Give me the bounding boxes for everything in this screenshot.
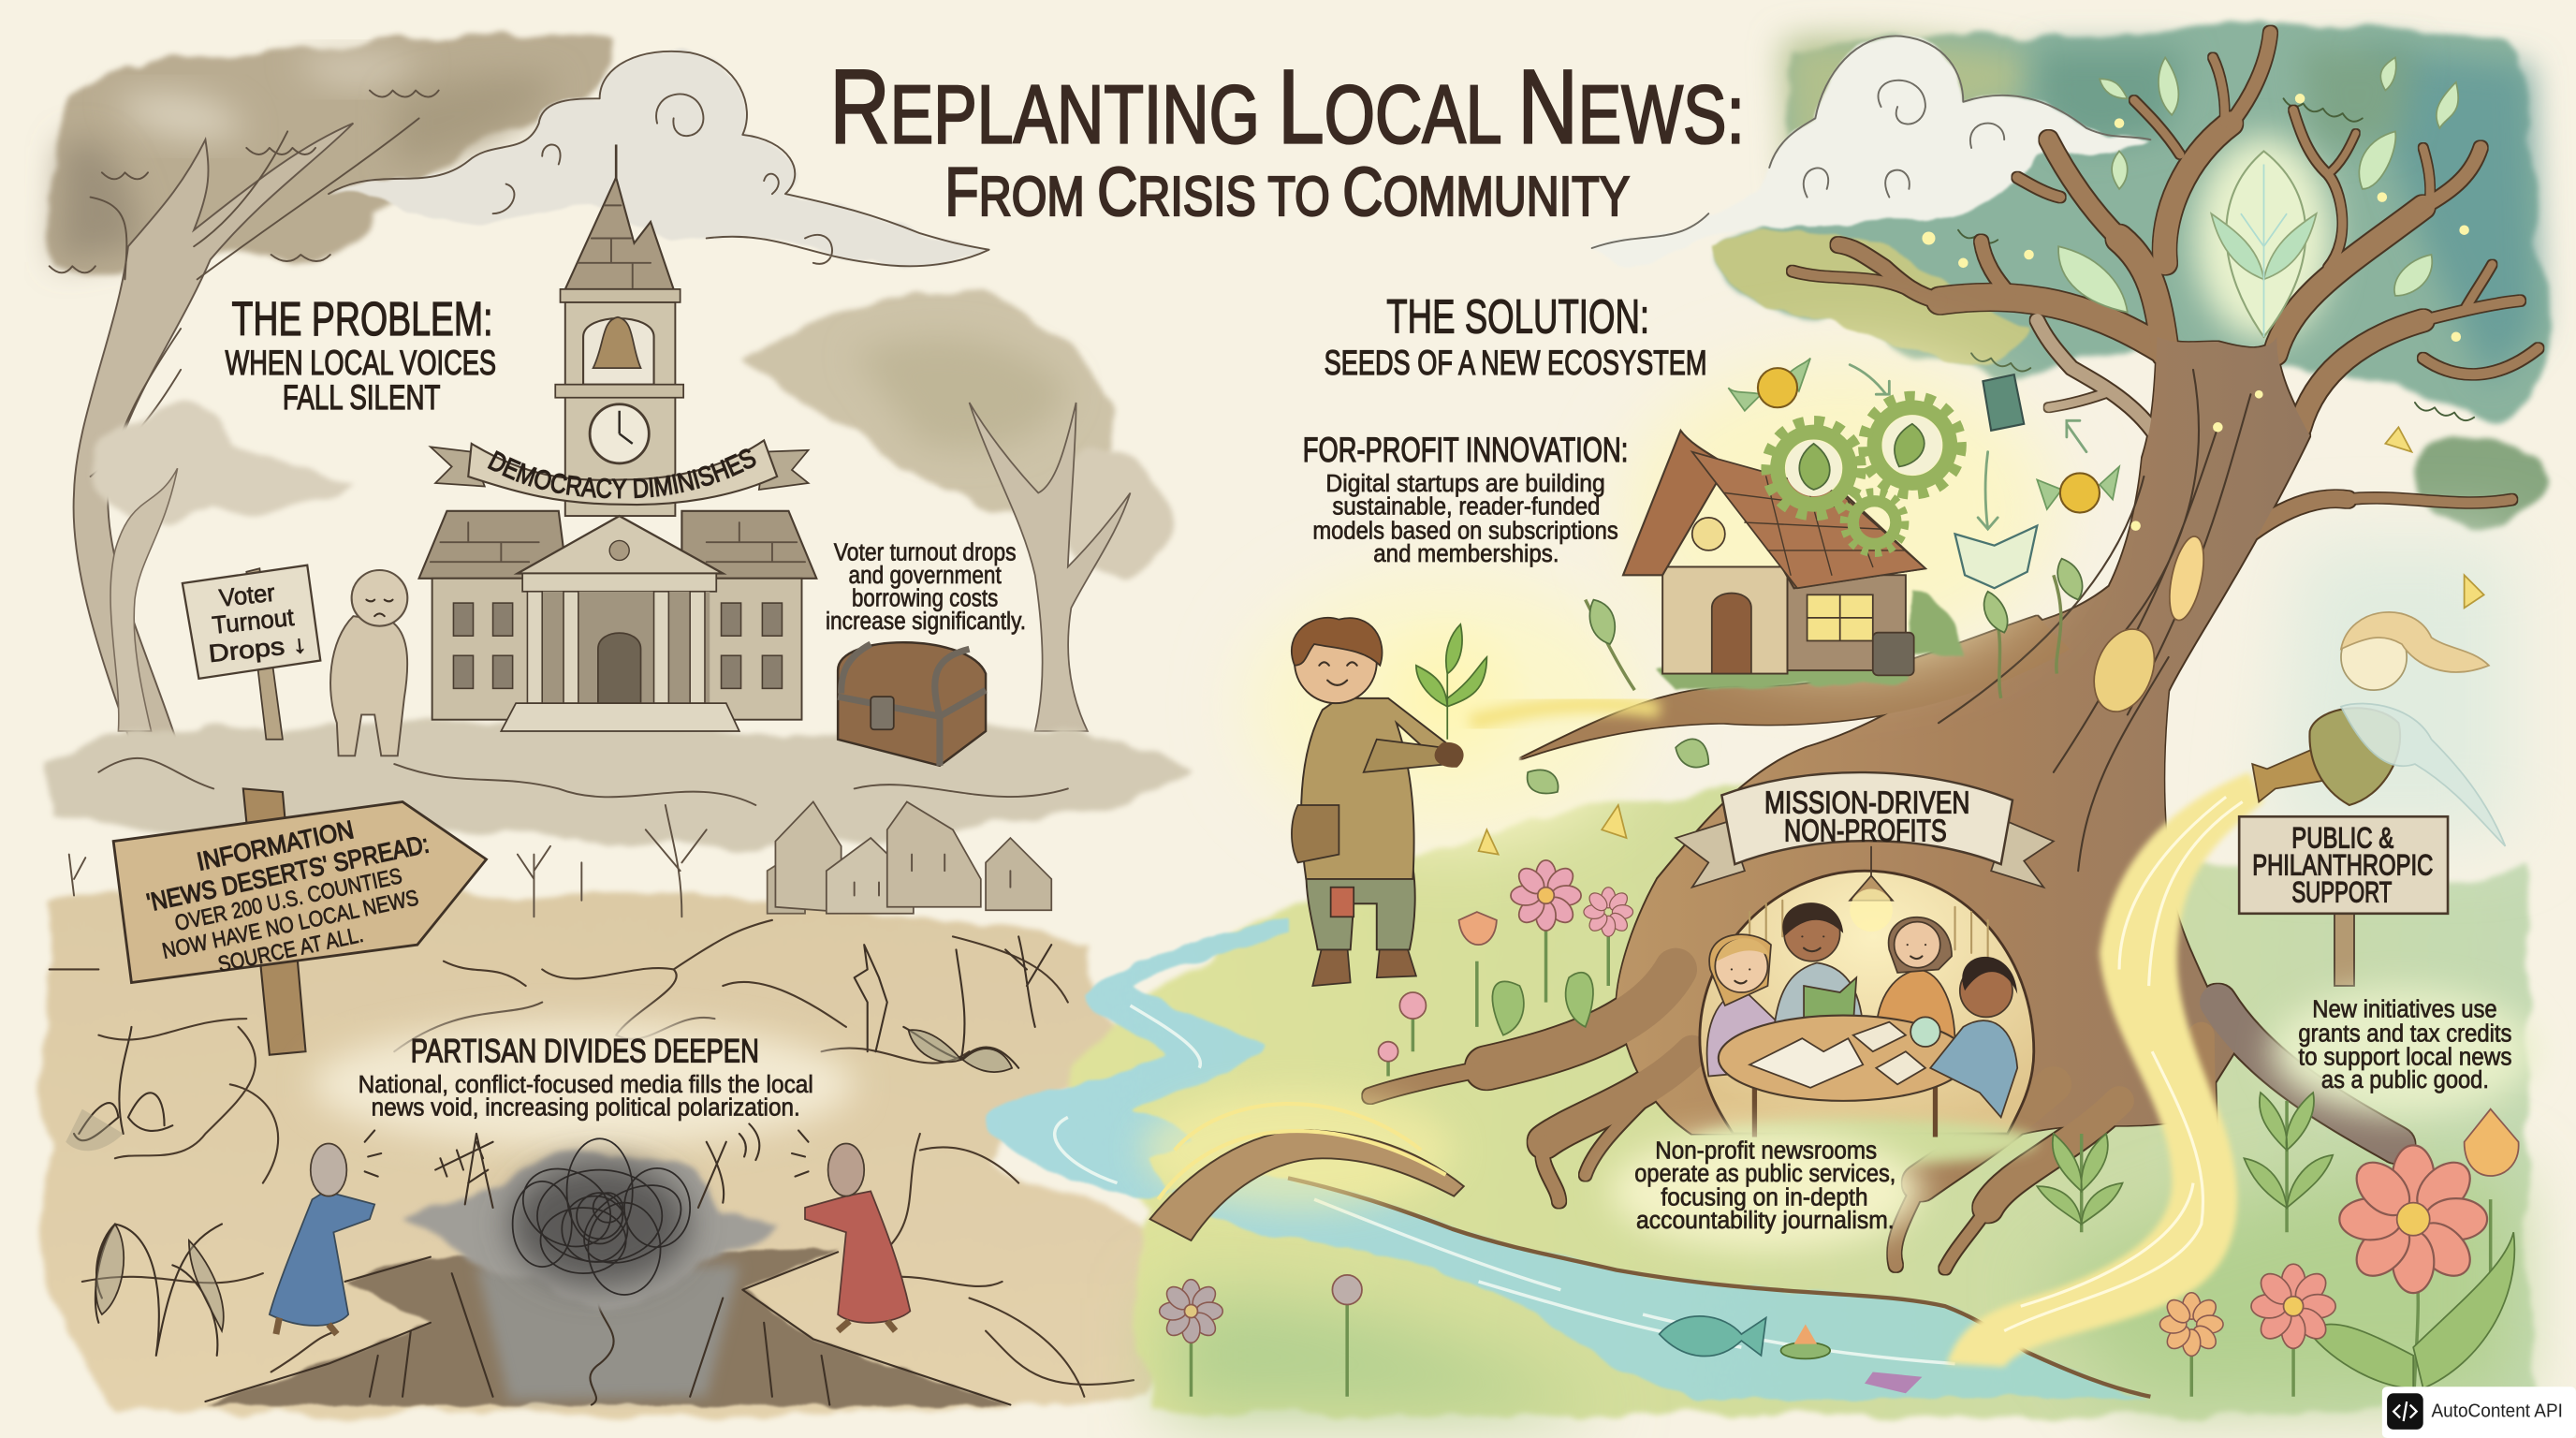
text: new initiatives <box>2298 994 2511 1093</box>
heading: the solution <box>1325 289 1707 382</box>
sign: voter turnout drops: Turnout <box>211 603 296 639</box>
icon: open book <box>1955 526 2037 588</box>
icon: watering can <box>2252 708 2400 805</box>
text: for-profit innovation: and memberships. <box>1373 539 1559 567</box>
trunk bark lines <box>1939 370 2250 871</box>
scattered glow dots <box>1922 94 2469 531</box>
tree roots <box>1370 969 2397 1269</box>
heading: the problem: FALL SILENT <box>283 378 440 417</box>
text: non-profit newsrooms: accountability journalism. <box>1636 1206 1895 1234</box>
wooden sign: information news deserts: SOURCE AT ALL. <box>216 923 366 977</box>
big dead tree <box>47 31 618 764</box>
table <box>1719 1016 1969 1137</box>
fish and lily pad <box>1660 1316 1922 1393</box>
cracks in desert <box>50 920 1134 1397</box>
soft light behind public support text <box>2272 990 2535 1114</box>
text: non-profit newsrooms: focusing on in-depth <box>1661 1183 1868 1211</box>
text: non-profit newsrooms: Non-profit newsrooms <box>1655 1136 1877 1164</box>
chasm <box>205 1249 1010 1406</box>
sign: public and philanthropic support: PUBLIC & <box>2291 821 2393 855</box>
butterflies <box>1479 427 2484 855</box>
child holding sprout <box>1292 608 1660 986</box>
portico <box>501 516 739 731</box>
text: non-profit newsrooms <box>1634 1136 1895 1234</box>
sun glow behind cottage <box>1627 361 2054 657</box>
heading: the problem <box>225 292 496 417</box>
banner: democracy diminishes <box>428 438 811 506</box>
panel: the solution scene <box>986 24 2550 1418</box>
soft light behind partisan text <box>313 1022 855 1147</box>
text: for-profit innovation: sustainable, reader-funded <box>1332 492 1600 520</box>
title: FROM CRISIS TO COMMUNITY <box>944 153 1630 230</box>
icon: green book <box>1983 374 2024 431</box>
bookshelves <box>1749 901 1988 961</box>
banner: mission-driven non-profits <box>1676 772 2054 888</box>
icon: satellite dish <box>698 1123 759 1208</box>
cottage branch <box>1519 616 2070 759</box>
hollow with children <box>1692 846 2037 1165</box>
text: for-profit innovation: Digital startups are building <box>1325 469 1605 497</box>
text: for-profit innovation: models based on subscriptions <box>1312 517 1618 545</box>
darker grass patches <box>1166 1170 2513 1413</box>
scribble smoke cloud <box>402 1138 781 1307</box>
soft grass under hollow <box>1692 1119 2037 1165</box>
golden stream <box>1947 772 2263 1367</box>
title <box>829 48 1745 230</box>
desert ground <box>42 888 1151 1414</box>
grass meadow <box>1074 785 2531 1418</box>
river <box>986 917 2150 1399</box>
bridge <box>1142 1091 1464 1240</box>
text: new initiatives: as a public good. <box>2321 1065 2489 1093</box>
cloud <box>1592 36 2150 265</box>
spirit figure <box>2341 612 2505 846</box>
sign: public and philanthropic support: PHILANTHROPIC <box>2252 848 2433 882</box>
icon: bell <box>593 317 641 368</box>
wilted plants <box>66 936 1051 1356</box>
figure: red arguing person <box>792 1130 910 1331</box>
sunny glow on left meadow <box>1249 575 1643 838</box>
glowing central leaf <box>2211 151 2317 337</box>
text: voter turnout description: increase significantly. <box>826 607 1026 635</box>
panel: the problem scene <box>34 28 1228 1424</box>
icon: arrows <box>1850 365 2086 529</box>
sky glow beside trunk <box>2267 542 2513 838</box>
icon: treasure chest <box>838 642 986 766</box>
main trunk <box>1617 337 2310 1134</box>
sign: voter turnout drops <box>183 565 320 740</box>
figure: blue arguing person <box>270 1130 381 1334</box>
title: REPLANTING LOCAL NEWS: <box>829 48 1745 166</box>
mossy platform <box>1660 592 1963 690</box>
ground cracks near town hall <box>98 758 1068 805</box>
cottage <box>1623 431 1963 690</box>
glowing knots in trunk <box>2084 534 2210 720</box>
text: partisan description: National, conflict-focused media fills the local <box>359 1070 813 1098</box>
sign: voter turnout drops: Voter <box>218 579 276 612</box>
small left tree <box>89 401 348 731</box>
large right tree <box>742 293 1173 731</box>
glowing leaves <box>2058 57 2458 312</box>
icon: gears <box>1767 398 1960 552</box>
heading: the solution: SEEDS OF A NEW ECOSYSTEM <box>1325 344 1707 382</box>
soft light behind non-profit text <box>1610 1132 1922 1251</box>
text: non-profit newsrooms: operate as public services, <box>1634 1159 1895 1187</box>
golden trail <box>1471 704 1660 723</box>
banner: democracy diminishes: DEMOCRACY DIMINISHES <box>487 448 756 498</box>
text: partisan description: news void, increasing political polarization. <box>372 1093 800 1122</box>
tree canopy <box>1712 24 2550 529</box>
icon: hanging lamp <box>1850 846 1893 932</box>
heading: partisan divides deepen: PARTISAN DIVIDES DEEPEN <box>411 1034 759 1070</box>
wooden sign: information news deserts <box>113 788 487 1055</box>
person: boy with magnifier <box>1910 957 2017 1117</box>
text: voter turnout description: and government <box>849 561 1002 589</box>
sign: public and philanthropic support: SUPPORT <box>2291 875 2392 909</box>
badge: autocontent api <box>2382 1387 2576 1438</box>
branch leaves <box>1528 559 2083 793</box>
building walls <box>432 579 802 720</box>
leafy twigs <box>1586 575 2061 698</box>
text: voter turnout description <box>826 537 1026 635</box>
text: new initiatives: New initiatives use <box>2312 994 2497 1022</box>
wooden sign: information news deserts: 'NEWS DESERTS' SPREAD: <box>144 829 432 917</box>
person: woman <box>1876 917 1955 1043</box>
text: for-profit innovation <box>1303 431 1628 567</box>
person: girl <box>1707 934 1799 1077</box>
heading: the solution: THE SOLUTION: <box>1386 289 1649 343</box>
banner: mission-driven non-profits: MISSION-DRIVEN <box>1764 786 1969 821</box>
icon: clock <box>590 404 649 463</box>
icon: radio tower <box>435 1134 493 1208</box>
ground wash around town hall <box>50 721 1191 847</box>
text: partisan description <box>359 1070 813 1122</box>
text: for-profit innovation: FOR-PROFIT INNOVATION: <box>1303 431 1628 469</box>
heading: the problem: WHEN LOCAL VOICES <box>225 344 496 382</box>
wooden sign: information news deserts: INFORMATION <box>195 814 356 876</box>
text: voter turnout description: Voter turnout drops <box>834 537 1017 565</box>
sign: public and philanthropic support <box>2239 816 2448 986</box>
icon: flying coins <box>1728 359 2119 513</box>
village <box>768 801 1051 914</box>
dead saplings <box>69 805 707 917</box>
icon: sad figure <box>330 570 407 756</box>
text: new initiatives: grants and tax credits <box>2298 1020 2511 1048</box>
text: voter turnout description: borrowing costs <box>852 584 998 612</box>
heading: the problem: THE PROBLEM: <box>232 292 493 345</box>
badge: autocontent api: AutoContent API <box>2431 1401 2563 1422</box>
banner: mission-driven non-profits: NON-PROFITS <box>1784 814 1947 849</box>
sign: voter turnout drops: Drops ↓ <box>207 629 308 668</box>
clock tower <box>555 144 683 516</box>
smoke cloud <box>329 51 989 266</box>
wooden sign: information news deserts: NOW HAVE NO LOCAL NEWS <box>160 886 421 964</box>
wooden sign: information news deserts: OVER 200 U.S. COUNTIES <box>173 864 404 936</box>
text: new initiatives: to support local news <box>2298 1042 2511 1070</box>
building roof <box>419 511 816 579</box>
flowers and saplings <box>1160 860 2519 1413</box>
tree trunk and branches <box>1370 33 2539 1269</box>
roof tile lines <box>431 522 805 562</box>
person: boy reading <box>1774 902 1863 1043</box>
windows <box>453 603 782 688</box>
town hall <box>417 144 818 732</box>
